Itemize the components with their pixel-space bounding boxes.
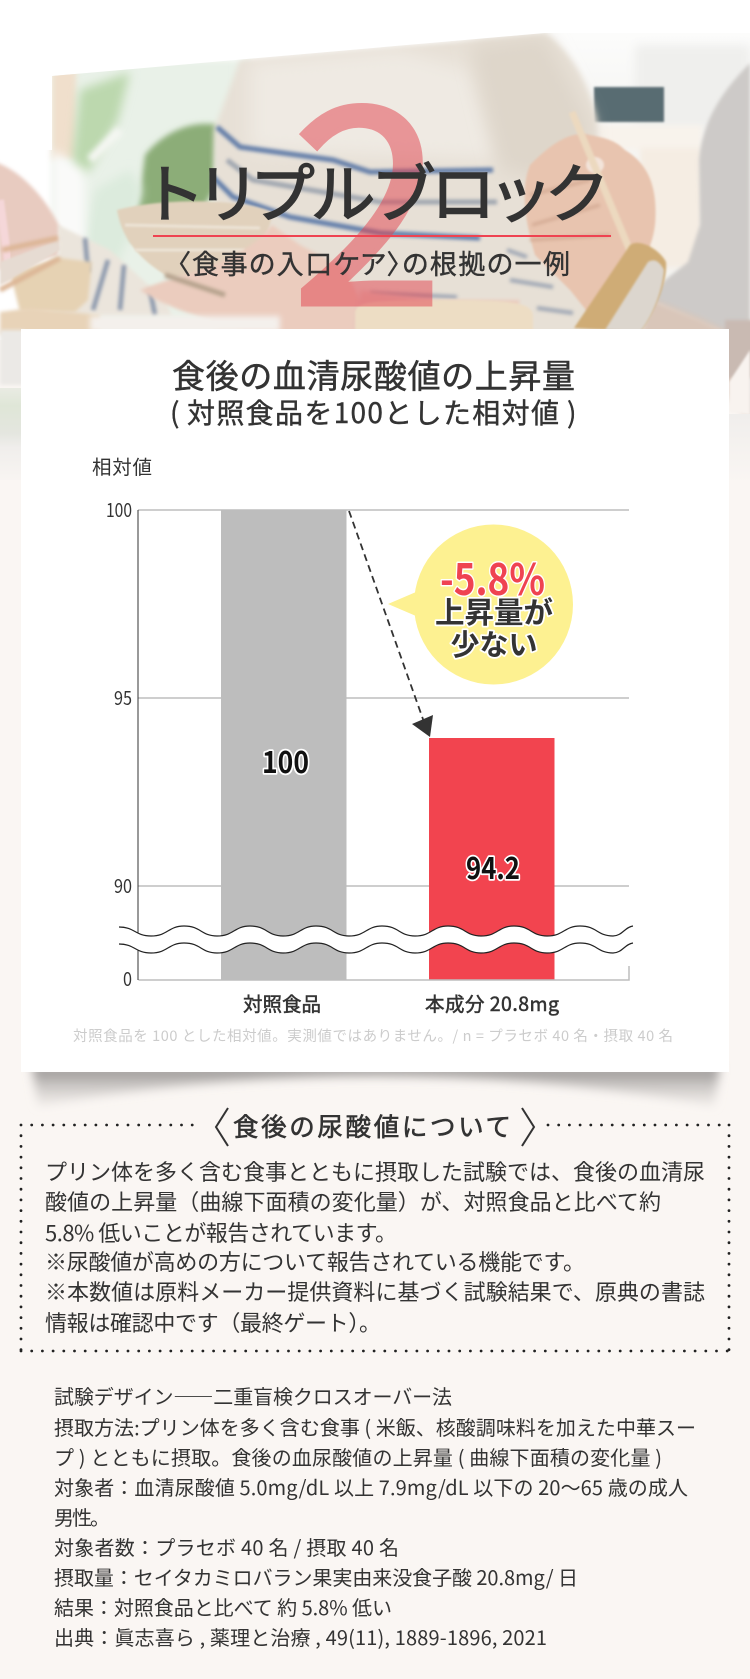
shirt with stripes (213, 33, 600, 335)
chopsticks (570, 112, 631, 250)
card heading: 食後の血清尿酸値の上昇量 (172, 350, 575, 398)
category labels: 本成分 20.8mg (425, 988, 559, 1017)
panel: about uric acid (21, 1107, 729, 1351)
callout bubble: 上昇量が (435, 590, 553, 632)
chart footnote: 対照食品を 100 とした相対値。実測値ではありません。/ n = プラセボ 40 名・摂取 40 名 (73, 1025, 673, 1046)
kitchen counter (638, 143, 700, 268)
study details: 対象者数：プラセボ 40 名 / 摂取 40 名 (54, 1532, 399, 1561)
title: トリプルブロック (150, 144, 605, 236)
left bowl and food (10, 258, 92, 312)
bar value 94.2: 94.2 (466, 844, 520, 888)
panel: chart card (21, 329, 729, 1072)
callout bubble: 少ない (450, 622, 538, 664)
bowl (117, 201, 272, 278)
large number 2: 2 (292, 0, 444, 381)
card subheading: ) (567, 392, 576, 432)
study details: 試験デザイン――二重盲検クロスオーバー法 (54, 1381, 452, 1410)
left sleeve (58, 225, 172, 316)
lower photo fade (0, 320, 750, 488)
body text: ※尿酸値が高めの方について報告されている機能です。 (45, 1245, 585, 1277)
study details: 摂取量：セイタカミロバラン果実由来没食子酸 20.8mg/ 日 (54, 1562, 578, 1591)
left hand (0, 162, 60, 270)
photo: people eating a meal (0, 0, 750, 488)
study details (54, 1381, 696, 1651)
body text: プリン体を多く含む食事とともに摂取した試験では、食後の血清尿 (45, 1155, 705, 1187)
study details: 出典：眞志喜ら , 薬理と治療 , 49(11), 1889-1896, 2021 (54, 1622, 547, 1651)
callout bubble: -5.8% (440, 546, 545, 608)
hand under bowl (140, 225, 520, 332)
arrow (349, 511, 433, 737)
food on chopsticks (574, 243, 666, 332)
left foliage background (48, 60, 240, 317)
bar: control (221, 510, 346, 980)
axis labels: 0 (123, 965, 132, 992)
category labels: 対照食品 (243, 988, 321, 1017)
axis labels: 100 (106, 496, 132, 523)
right background (585, 42, 750, 278)
callout bubble (388, 524, 573, 684)
axis title: 相対値 (92, 451, 152, 480)
body text (45, 1155, 705, 1338)
dotted frame (21, 1125, 729, 1351)
study details: 対象者：血清尿酸値 5.0mg/dL 以上 7.9mg/dL 以下の 20～65 歳の成人 (54, 1472, 688, 1501)
card subheading: ( (170, 392, 179, 432)
study details: 結果：対照食品と比べて 約 5.8% 低い (54, 1592, 392, 1621)
bar value 100: 100 (262, 738, 309, 782)
body text: 酸値の上昇量（曲線下面積の変化量）が、対照食品と比べて約 (45, 1185, 661, 1217)
category labels (243, 988, 559, 1017)
axis labels (106, 496, 132, 992)
axis labels: 95 (114, 684, 132, 711)
card subheading: 対照食品を100とした相対値 (187, 392, 559, 432)
bar chart (106, 496, 633, 992)
body text: 情報は確認中です（最終ゲート）。 (45, 1306, 381, 1338)
right hand (525, 134, 656, 315)
microwave (594, 87, 664, 122)
axis break wave (119, 926, 633, 953)
body text: ※本数値は原料メーカー提供資料に基づく試験結果で、原典の書誌 (45, 1275, 705, 1307)
study details: 摂取方法:プリン体を多く含む食事 ( 米飯、核酸調味料を加えた中華スー (54, 1412, 696, 1441)
section heading: 食後の尿酸値について (233, 1107, 511, 1144)
body text: 5.8% 低いことが報告されています。 (45, 1216, 397, 1248)
study details: 男性。 (54, 1502, 110, 1531)
study details: プ ) とともに摂取。食後の血尿酸値の上昇量 ( 曲線下面積の変化量 ) (54, 1442, 662, 1471)
bar: ingredient (429, 738, 554, 980)
right person's grey sleeve (658, 64, 750, 402)
axis labels: 90 (114, 872, 132, 899)
card shadow (32, 1066, 720, 1106)
wooden cup (355, 300, 533, 329)
subtitle: 〈食事の入口ケア〉の根拠の一例 (177, 243, 570, 282)
